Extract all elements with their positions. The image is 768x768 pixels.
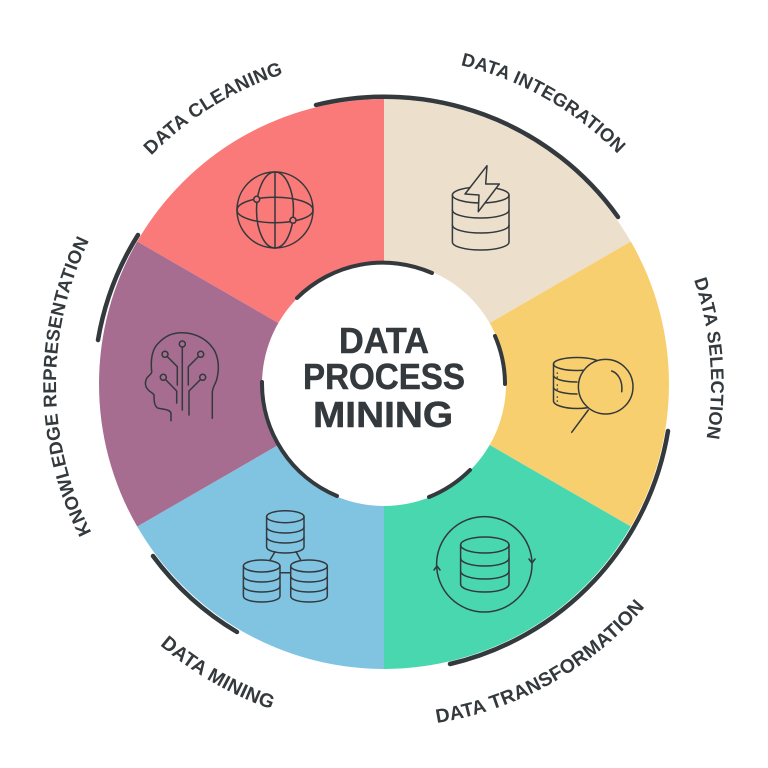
outer accent arcs (98, 97, 668, 664)
title: data process mining: MINING (313, 394, 453, 435)
label: data cleaning: DATA CLEANING (143, 63, 282, 155)
icon: head with circuit brain (146, 333, 218, 421)
segment: data mining (137, 384, 384, 669)
icon: database in refresh circle (434, 517, 535, 612)
label: data transformation: DATA TRANSFORMATION (436, 599, 644, 723)
center white circle (262, 262, 506, 506)
title: data process mining: DATA (339, 320, 429, 361)
segment: data transformation (384, 384, 631, 669)
title: data process mining: PROCESS (303, 356, 465, 397)
icon: database with magnifier (554, 358, 633, 432)
icon: three connected databases (243, 511, 327, 602)
label: data mining: DATA MINING (160, 635, 274, 708)
label: data integration: DATA INTEGRATION (462, 53, 626, 154)
icon: database with lightning bolt (452, 166, 509, 250)
inner accent arcs (262, 263, 505, 497)
segment: data selection (384, 242, 669, 526)
segment: knowledge representation (99, 242, 384, 526)
segment: data integration (384, 99, 631, 384)
donut wheel of six segments (99, 99, 669, 669)
label: data selection: DATA SELECTION (694, 277, 724, 439)
label: knowledge representation: KNOWLEDGE REPRESENTATION (43, 236, 91, 537)
icon: globe (237, 172, 313, 248)
segment: data cleaning (137, 99, 384, 384)
title: data process mining (303, 320, 465, 435)
